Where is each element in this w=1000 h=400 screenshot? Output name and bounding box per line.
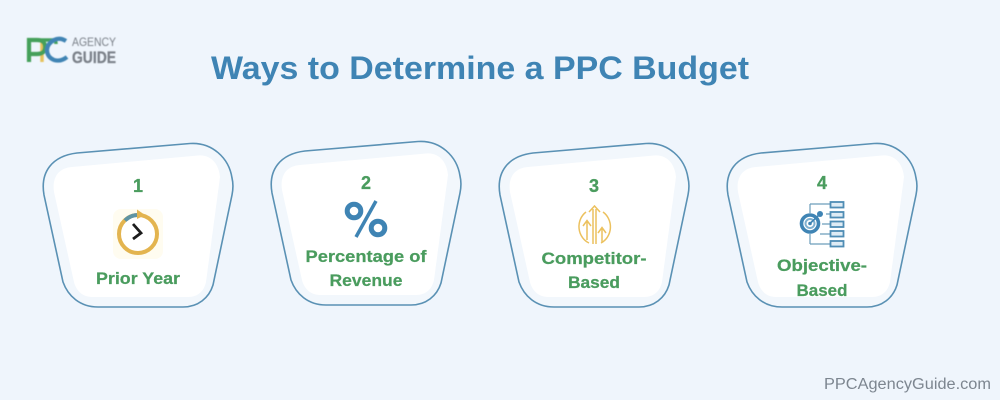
label: Percentage of	[306, 247, 427, 266]
logo wordmark: AGENCY	[72, 35, 116, 49]
label: Based	[796, 281, 848, 300]
label	[777, 256, 867, 300]
footer website: PPCAgencyGuide.com	[824, 376, 991, 393]
logo: PPC Agency Guide	[29, 35, 116, 67]
title: Ways to Determine a PPC Budget	[211, 50, 749, 86]
number: 1	[133, 176, 143, 196]
icon: target with list	[802, 202, 844, 246]
panel: card 3 Competitor-Based	[499, 143, 689, 307]
panel: card 4 Objective-Based	[727, 143, 917, 307]
icon: arrows in circle	[579, 206, 610, 244]
card shape	[43, 143, 233, 307]
panel: card 1 Prior Year	[43, 143, 233, 307]
card shape	[499, 143, 689, 307]
label: Competitor-	[542, 249, 646, 268]
label	[306, 247, 427, 290]
number: 2	[361, 173, 371, 193]
label: Based	[568, 273, 620, 292]
card shape	[271, 141, 461, 305]
number: 3	[589, 176, 599, 196]
icon: percent sign	[347, 201, 385, 237]
logo mark	[29, 39, 67, 62]
label	[542, 249, 646, 292]
icon: clock	[113, 209, 163, 259]
panel: card 2 Percentage of Revenue	[271, 141, 461, 305]
logo wordmark: GUIDE	[72, 49, 116, 67]
label: Objective-	[777, 256, 867, 275]
label: Revenue	[330, 271, 402, 290]
logo wordmark	[72, 35, 116, 67]
label: Prior Year	[96, 269, 180, 288]
card shape	[727, 143, 917, 307]
number: 4	[817, 173, 827, 193]
